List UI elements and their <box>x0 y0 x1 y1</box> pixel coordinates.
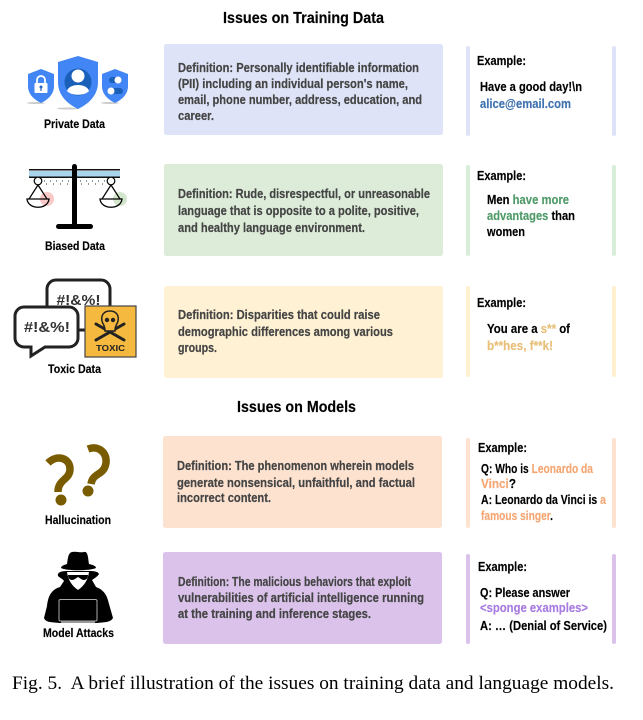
panel: model attacks row <box>43 552 616 644</box>
panel: toxic data example: b**hes, f**k! <box>487 339 553 353</box>
panel: hallucination example: Vinci? <box>481 477 516 491</box>
panel: private data definition: email, phone number, address, education, and <box>178 93 422 107</box>
label: Model Attacks: Model Attacks <box>43 626 114 640</box>
panel: biased data definition <box>164 164 443 256</box>
panel: model attacks definition <box>163 552 442 644</box>
panel: toxic data row <box>15 280 616 378</box>
panel: hallucination example <box>466 438 616 528</box>
panel: model attacks example <box>466 554 616 644</box>
panel: biased data definition: Definition: Rude, disrespectful, or unreasonable <box>178 187 430 201</box>
panel: toxic data definition: demographic differences among various <box>178 325 393 339</box>
panel: hallucination example: Q: Who is Leonardo da <box>481 462 594 476</box>
panel: biased data example: Example: <box>477 169 526 183</box>
panel: model attacks definition: vulnerabilities of artificial intelligence running <box>178 591 424 605</box>
panel: private data definition <box>164 44 443 135</box>
panel: biased data example <box>466 165 616 256</box>
panel: model attacks definition: Definition: The malicious behaviors that exploit <box>178 575 412 589</box>
panel: private data example: Have a good day!\n <box>480 80 582 94</box>
panel: toxic data definition <box>164 286 443 378</box>
panel: model attacks example: A: … (Denial of Service) <box>480 619 607 633</box>
panel: model attacks example: <sponge examples> <box>480 601 588 615</box>
icon: privacy shields <box>27 56 128 110</box>
panel: biased data row <box>27 164 616 256</box>
icon: question marks <box>48 448 106 506</box>
panel: toxic data example: You are a s** of <box>487 322 571 336</box>
caption: Fig. 5. A brief illustration of the issues on training data and language models. <box>12 674 614 694</box>
icon: toxic speech bubbles and sign: #!&%! <box>24 319 70 336</box>
panel: hallucination definition: incorrect content. <box>177 491 271 505</box>
panel: model attacks definition: at the training and inference stages. <box>178 607 371 621</box>
panel: model attacks example: Q: Please answer <box>480 586 570 600</box>
panel: toxic data definition: groups. <box>178 341 217 355</box>
panel: private data example: alice@email.com <box>480 97 571 111</box>
label: Toxic Data: Toxic Data <box>48 362 101 376</box>
panel: private data definition: career. <box>178 109 214 123</box>
panel: private data definition: (PII) including an individual person's name, <box>178 77 408 91</box>
label: Private Data: Private Data <box>44 117 105 131</box>
panel: model attacks example: Example: <box>478 560 527 574</box>
panel: hallucination example: A: Leonardo da Vinci is a <box>481 493 607 507</box>
heading: Issues on Models: Issues on Models <box>237 399 356 416</box>
panel: biased data example: Men have more <box>487 193 569 207</box>
panel: hallucination example: famous singer. <box>481 509 553 523</box>
panel: hallucination example: Example: <box>478 441 527 455</box>
icon: hacker with laptop <box>44 552 113 623</box>
panel: private data definition: Definition: Personally identifiable information <box>178 61 419 75</box>
icon: toxic speech bubbles and sign: #!&%! <box>56 292 100 309</box>
panel: hallucination definition: generate nonsensical, unfaithful, and factual <box>177 476 415 490</box>
panel: private data example <box>466 46 616 136</box>
panel: hallucination definition: Definition: The phenomenon wherein models <box>177 459 414 473</box>
panel: biased data example: women <box>486 225 525 239</box>
panel: toxic data example: Example: <box>477 296 526 310</box>
icon: toxic speech bubbles and sign: TOXIC <box>96 343 125 353</box>
panel: private data example: Example: <box>477 54 526 68</box>
panel: hallucination row <box>45 436 616 528</box>
panel: private data row <box>27 44 616 136</box>
icon: toxic speech bubbles and sign <box>15 280 136 357</box>
panel: toxic data example <box>466 286 616 377</box>
icon: balance scale <box>27 164 127 229</box>
label: Hallucination: Hallucination <box>45 513 111 527</box>
panel: biased data example: advantages than <box>487 209 575 223</box>
heading: Issues on Training Data: Issues on Training Data <box>223 10 384 27</box>
label: Biased Data: Biased Data <box>45 239 105 253</box>
panel: hallucination definition <box>163 436 442 528</box>
panel: biased data definition: and healthy language environment. <box>178 221 365 235</box>
panel: biased data definition: language that is opposite to a polite, positive, <box>178 204 419 218</box>
panel: toxic data definition: Definition: Disparities that could raise <box>178 308 380 322</box>
